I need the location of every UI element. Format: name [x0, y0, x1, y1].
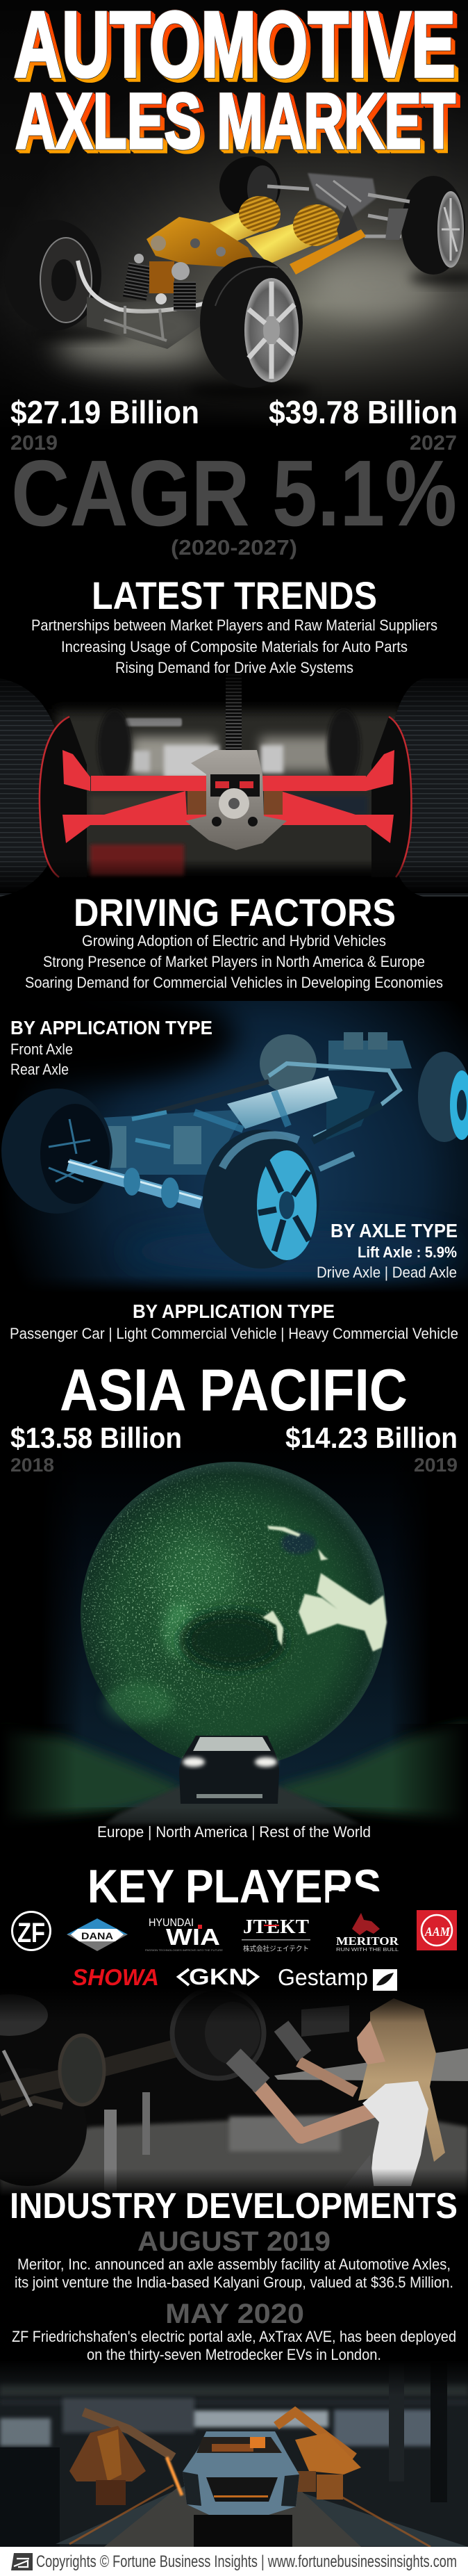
mechanic woman: [233, 1998, 445, 2196]
segment: by axle type: Drive Axle | Dead Axle: [317, 1264, 457, 1281]
logo: Hyundai WIA: PASSION TECHNOLOGIES IMPROVE INTO THE FUTURE: [145, 1948, 223, 1952]
logo: DANA: [67, 1918, 128, 1951]
segment: by application type (vehicle): [10, 1301, 458, 1342]
heading: key players: KEY PLAYERS: [87, 1860, 381, 1913]
trend list: [31, 617, 437, 676]
logo: JTEKT: 株式会社ジェイテクト: [243, 1944, 309, 1953]
logo: Showa: SHOWA: [72, 1964, 159, 1990]
front right wheel: [200, 257, 303, 388]
market size 2027: $39.78 Billion: [269, 394, 458, 430]
differential housing: [185, 750, 287, 850]
logo: Meritor: [336, 1913, 399, 1953]
car body on line: [183, 2431, 299, 2547]
front axle: [68, 1161, 201, 1208]
market size 2019: [10, 394, 199, 455]
logo: Gestamp: Gestamp: [278, 1964, 368, 1990]
segment: by application type (axle position): BY APPLICATION TYPE: [10, 1017, 212, 1038]
photo: blue chassis: [0, 987, 468, 1293]
segment: by application type (vehicle): BY APPLICATION TYPE: [133, 1301, 335, 1322]
development: May 2020: MAY 2020: [165, 2299, 304, 2329]
front subframe: [78, 254, 206, 349]
blue frame: [269, 1063, 400, 1137]
logo: GKN: GKN: [189, 1964, 248, 1989]
brake drum: [172, 1988, 264, 2078]
regional value 2018: [10, 1421, 182, 1476]
logo: Hyundai WIA: [145, 1917, 223, 1952]
photo: mechanic under vehicle: [0, 1988, 468, 2196]
engine: [101, 1109, 245, 1175]
rear left wheel: [219, 156, 281, 218]
logo: ZF: ZF: [17, 1918, 45, 1948]
gold cylinders: [147, 196, 366, 275]
robot left: [69, 2412, 182, 2505]
segment: by axle type: Lift Axle : 5.9%: [358, 1244, 457, 1261]
development: May 2020: on the thirty-seven Metrodecker EVs in London.: [87, 2346, 381, 2363]
regional value 2019: $14.23 Billion: [285, 1421, 458, 1454]
logo: JTEKT: JTEKT: [243, 1916, 309, 1938]
right tyre: [371, 678, 468, 897]
development: May 2020: [12, 2299, 456, 2363]
logo: AAM: AAM: [424, 1925, 451, 1939]
front right wheel: [203, 1130, 319, 1269]
logo: DANA: DANA: [81, 1930, 113, 1941]
photo: robotic car factory: [0, 2360, 468, 2547]
CAGR: (2020-2027): [171, 535, 297, 560]
differential housing: [60, 2035, 104, 2105]
rear right wheel: [418, 1052, 468, 1142]
other regions: Europe | North America | Rest of the World: [97, 1823, 371, 1841]
rear left wheel: [260, 1034, 317, 1093]
silver cylinder: [227, 1076, 337, 1129]
robot right: [276, 2412, 361, 2500]
trend list: Partnerships between Market Players and Raw Material Suppliers: [31, 617, 437, 634]
trend list: Increasing Usage of Composite Materials for Auto Parts: [61, 638, 408, 655]
heading: asia pacific: ASIA PACIFIC: [60, 1358, 408, 1424]
logo: Meritor: RUN WITH THE BULL: [336, 1948, 399, 1953]
road bushes right: [279, 1724, 468, 1821]
development: August 2019: AUGUST 2019: [137, 2226, 331, 2257]
rear differential: [308, 173, 376, 217]
front left wheel: [1, 1089, 112, 1214]
regional value 2019: 2019: [414, 1454, 458, 1476]
segment: by axle type: [317, 1220, 458, 1281]
title: [14, 0, 456, 165]
rear right wheel: [401, 176, 465, 275]
red control arms: [62, 750, 394, 843]
driving factors list: [25, 932, 443, 991]
photo: red axle: [0, 667, 468, 897]
regional value 2018: 2018: [10, 1454, 54, 1476]
market size 2027: [269, 394, 458, 455]
driving factors list: Growing Adoption of Electric and Hybrid Vehicles: [82, 932, 386, 949]
heading: driving factors: [25, 890, 443, 991]
icon: Fortune Business Insights logo: [11, 2553, 33, 2570]
segment: by application type (axle position): Front Axle: [10, 1041, 73, 1058]
development: August 2019: [15, 2226, 453, 2291]
logo: Hyundai WIA: WIA: [166, 1924, 220, 1950]
market size 2027: 2027: [410, 432, 457, 455]
coil spring: [226, 673, 242, 751]
logo: ZF: [12, 1911, 50, 1950]
logo: Meritor: MERITOR: [336, 1934, 399, 1948]
heading: driving factors: DRIVING FACTORS: [74, 890, 396, 934]
market size 2019: 2019: [10, 432, 58, 455]
trend list: Rising Demand for Drive Axle Systems: [115, 659, 353, 676]
segment: by application type (axle position): Rear Axle: [10, 1061, 69, 1078]
market size 2019: $27.19 Billion: [10, 394, 199, 430]
regional value 2019: [285, 1421, 458, 1476]
heading: latest trends: [31, 573, 437, 676]
left tyre: [0, 678, 87, 897]
segment: by application type (axle position): [10, 1017, 212, 1078]
footer: [0, 2547, 468, 2576]
road bushes left: [0, 1731, 179, 1821]
regional value 2018: $13.58 Billion: [10, 1421, 182, 1454]
logo: AAM: [417, 1910, 457, 1950]
logos row one: [12, 1910, 457, 1953]
light continents: [262, 1526, 387, 1652]
globe and road scene: [10, 1462, 468, 1825]
car: [179, 1736, 279, 1804]
logo: GKN: [178, 1964, 258, 1989]
road: [104, 1786, 361, 1825]
driving factors list: Strong Presence of Market Players in North America & Europe: [43, 953, 425, 970]
hero photo: axle chassis: [0, 56, 468, 416]
factory floor: [56, 2485, 468, 2547]
logo: JTEKT: [242, 1916, 310, 1953]
globe: [81, 1462, 387, 1768]
logo: Hyundai WIA: HYUNDAI: [149, 1917, 194, 1929]
front left wheel: [33, 225, 101, 329]
heading: latest trends: LATEST TRENDS: [92, 573, 377, 617]
segment: by axle type: BY AXLE TYPE: [331, 1220, 458, 1241]
rear engine block: [328, 1032, 412, 1070]
logos row two: [72, 1964, 397, 1991]
